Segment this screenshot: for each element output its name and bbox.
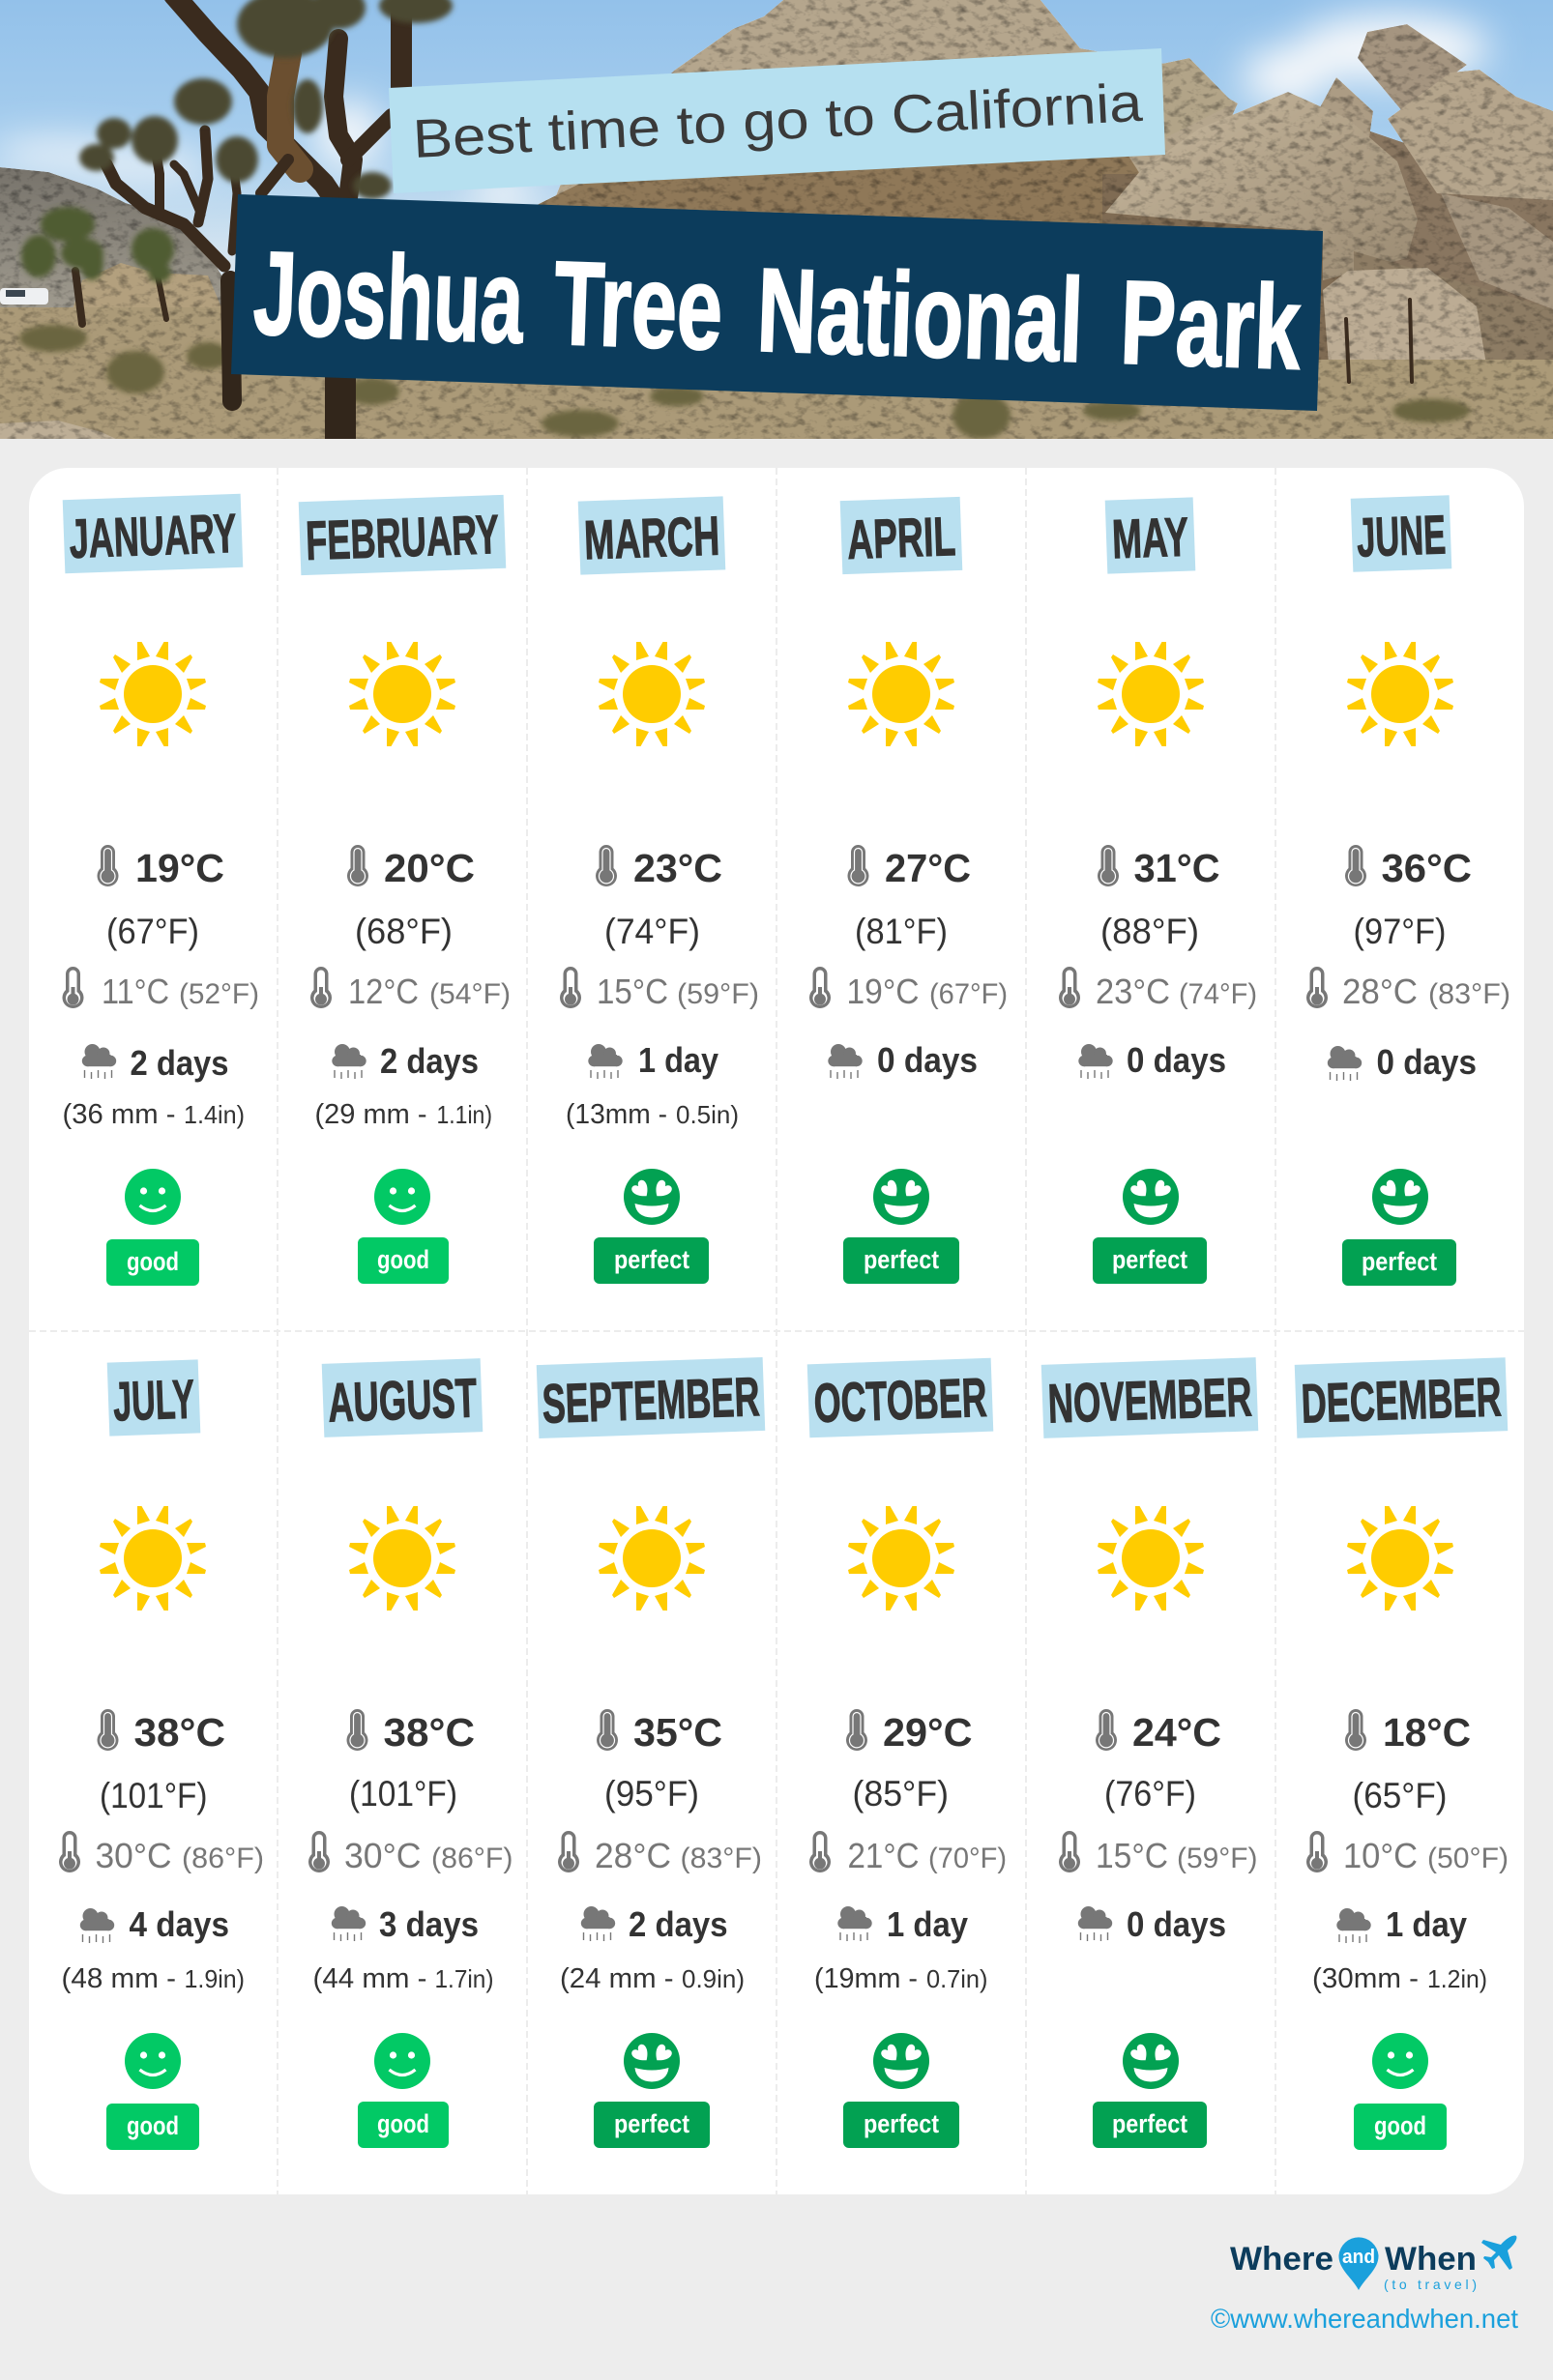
month label: November: [1041, 1357, 1258, 1438]
high temperature: (95°F): [604, 1774, 699, 1814]
icon: sun: [1098, 642, 1204, 746]
rating: perfect: [1342, 1169, 1456, 1286]
icon: sun: [599, 642, 705, 746]
rating: perfect: perfect: [864, 2109, 939, 2138]
rainfall: 4 days: [130, 1904, 229, 1944]
high temperature: [97, 845, 224, 951]
rainfall: 1.7in): [435, 1964, 493, 1993]
low temperature: 30°C: [344, 1836, 422, 1875]
low temperature: [809, 1831, 1007, 1875]
rating: good: [358, 2033, 449, 2148]
rainfall: 0.9in): [682, 1964, 745, 1993]
low temperature: (54°F): [429, 978, 511, 1010]
low temperature: (86°F): [431, 1843, 513, 1874]
month label: June: [1351, 495, 1451, 572]
low temperature: 15°C: [597, 972, 668, 1011]
low temperature: 19°C: [847, 972, 919, 1011]
low temperature: [1059, 1831, 1257, 1875]
rainfall: 2 days: [130, 1043, 228, 1083]
month label: April: APRIL: [846, 506, 956, 571]
high temperature: [1345, 1709, 1471, 1815]
month label: January: JANUARY: [69, 503, 238, 570]
rating: good: [1354, 2033, 1447, 2150]
rainfall: 0 days: [1127, 1040, 1226, 1080]
hero photo: Joshua trees and boulders: [0, 0, 1553, 454]
rainfall: 2 days: [629, 1904, 727, 1944]
panel: April: [809, 497, 1008, 1284]
rainfall: [313, 1904, 493, 1994]
rainfall: 0 days: [1127, 1904, 1226, 1944]
rainfall: 0 days: [877, 1040, 978, 1080]
rainfall: 2 days: [380, 1041, 479, 1081]
icon: sun: [349, 642, 455, 746]
rainfall: [62, 1904, 245, 1994]
rating: good: good: [377, 1245, 429, 1274]
panel: May: [1059, 497, 1257, 1284]
panel: November: [1041, 1357, 1258, 2148]
high temperature: (76°F): [1104, 1774, 1196, 1814]
low temperature: (59°F): [677, 978, 759, 1010]
low temperature: 23°C: [1096, 972, 1170, 1011]
month label: May: MAY: [1111, 507, 1189, 570]
low temperature: (83°F): [1428, 978, 1510, 1010]
rainfall: 0.5in): [676, 1100, 739, 1129]
high temperature: (65°F): [1352, 1776, 1447, 1815]
panel: June: [1306, 495, 1510, 1286]
low temperature: [62, 967, 259, 1011]
high temperature: 38°C: [133, 1710, 225, 1755]
high temperature: 36°C: [1381, 846, 1472, 890]
rating: good: good: [127, 2111, 179, 2140]
logo: Where and When (to travel): [1230, 2236, 1516, 2292]
icon: sun: [848, 642, 954, 746]
high temperature: 18°C: [1383, 1710, 1471, 1755]
high temperature: [1345, 845, 1472, 951]
rainfall: 1.9in): [184, 1964, 245, 1993]
rainfall: 1 day: [1386, 1904, 1467, 1944]
logo: Where and When (to travel): When: [1385, 2241, 1477, 2278]
high temperature: 29°C: [883, 1710, 973, 1755]
title banner: Joshua Tree National Park: Park: [1119, 256, 1304, 395]
low temperature: 28°C: [1342, 972, 1418, 1011]
low temperature: (83°F): [681, 1843, 762, 1874]
rating: good: good: [377, 2109, 429, 2138]
rainfall: (29 mm -: [315, 1099, 427, 1130]
high temperature: 35°C: [633, 1710, 722, 1755]
subtitle banner: Best time to go to California: Best time to go to California: [411, 72, 1145, 169]
low temperature: [560, 967, 759, 1011]
high temperature: [346, 1709, 475, 1814]
logo: Where and When (to travel): Where: [1230, 2241, 1333, 2278]
rainfall: (48 mm -: [62, 1963, 176, 1994]
low temperature: (70°F): [928, 1843, 1007, 1874]
panel: monthly climate card: [29, 468, 1524, 2194]
rainfall: 0.7in): [926, 1964, 988, 1993]
month label: January: [63, 494, 243, 573]
low temperature: [1306, 967, 1510, 1011]
low temperature: 30°C: [95, 1836, 172, 1875]
low temperature: 21°C: [847, 1836, 919, 1875]
icon: sun: [1347, 642, 1453, 746]
month label: July: JULY: [112, 1369, 195, 1433]
rainfall: [315, 1041, 492, 1130]
rainfall: [560, 1904, 745, 1994]
month label: August: [322, 1358, 483, 1437]
rainfall: (13mm -: [566, 1099, 667, 1130]
rating: perfect: perfect: [1112, 2109, 1187, 2138]
rating: perfect: [1093, 1169, 1207, 1284]
high temperature: 19°C: [135, 846, 224, 890]
month label: October: OCTOBER: [813, 1367, 988, 1435]
rainfall: [828, 1040, 978, 1080]
high temperature: [1098, 845, 1220, 951]
month label: November: NOVEMBER: [1047, 1366, 1253, 1436]
rainfall: 1.4in): [184, 1100, 245, 1129]
high temperature: (97°F): [1354, 912, 1447, 951]
icon: sun: [100, 1506, 206, 1611]
high temperature: 24°C: [1132, 1710, 1221, 1755]
rainfall: [814, 1904, 988, 1994]
title banner: Joshua Tree National Park: National: [755, 245, 1085, 388]
rating: good: good: [1374, 2111, 1426, 2140]
low temperature: 11°C: [102, 972, 169, 1011]
logo: Where and When (to travel): (to travel): [1384, 2277, 1477, 2292]
high temperature: 27°C: [885, 846, 971, 890]
low temperature: 10°C: [1343, 1836, 1418, 1875]
high temperature: [347, 845, 475, 951]
rainfall: (36 mm -: [62, 1099, 176, 1130]
rating: good: [106, 1169, 199, 1286]
low temperature: (86°F): [182, 1843, 264, 1874]
high temperature: [1096, 1709, 1221, 1814]
low temperature: 28°C: [595, 1836, 671, 1875]
rainfall: [1328, 1042, 1477, 1082]
subtitle banner: Best time to go to California: [389, 48, 1165, 193]
low temperature: [310, 967, 511, 1011]
high temperature: 20°C: [384, 846, 475, 890]
low temperature: [1059, 967, 1257, 1011]
rainfall: (24 mm -: [560, 1963, 673, 1994]
low temperature: (50°F): [1427, 1843, 1509, 1874]
month label: June: JUNE: [1356, 504, 1447, 569]
month label: October: [807, 1358, 993, 1437]
panel: September: [537, 1357, 765, 2148]
low temperature: 12°C: [348, 972, 419, 1011]
month label: September: [537, 1357, 765, 1438]
month label: April: [840, 497, 962, 574]
high temperature: [847, 845, 971, 951]
low temperature: (74°F): [1179, 978, 1257, 1010]
high temperature: [597, 1709, 722, 1814]
rainfall: (44 mm -: [313, 1963, 427, 1994]
high temperature: (85°F): [853, 1774, 949, 1814]
month label: March: MARCH: [583, 506, 720, 571]
high temperature: (81°F): [855, 912, 948, 951]
icon: sun: [848, 1506, 954, 1611]
icon: sun: [599, 1506, 705, 1611]
icon: sun: [100, 642, 206, 746]
month label: May: [1105, 497, 1195, 574]
rating: perfect: perfect: [1112, 1245, 1187, 1274]
rating: perfect: perfect: [1362, 1247, 1437, 1276]
month label: August: AUGUST: [327, 1367, 478, 1435]
rainfall: [566, 1040, 739, 1130]
high temperature: (74°F): [604, 912, 700, 951]
rating: good: [358, 1169, 449, 1284]
rainfall: [1078, 1904, 1226, 1944]
rating: perfect: [843, 2033, 959, 2148]
rating: perfect: [843, 1169, 959, 1284]
car: [0, 288, 48, 305]
rating: good: [106, 2033, 199, 2150]
rainfall: (30mm -: [1312, 1963, 1419, 1994]
rating: perfect: perfect: [614, 1245, 689, 1274]
rating: perfect: perfect: [864, 1245, 939, 1274]
panel: October: [807, 1358, 1007, 2148]
high temperature: 23°C: [633, 846, 722, 890]
icon: map pin: [1338, 2237, 1379, 2290]
high temperature: [596, 845, 722, 951]
title banner: Joshua Tree National Park: Joshua: [251, 227, 527, 368]
rainfall: 3 days: [379, 1904, 479, 1944]
high temperature: (68°F): [355, 912, 453, 951]
rainfall: [1078, 1040, 1226, 1080]
rating: perfect: [594, 2033, 710, 2148]
low temperature: [558, 1831, 762, 1875]
high temperature: 38°C: [383, 1710, 475, 1755]
month label: February: [299, 495, 506, 575]
high temperature: (67°F): [106, 912, 199, 951]
high temperature: [97, 1709, 225, 1815]
high temperature: (101°F): [349, 1774, 457, 1814]
rainfall: [1312, 1904, 1487, 1994]
high temperature: [846, 1709, 973, 1814]
low temperature: (59°F): [1177, 1843, 1257, 1874]
logo: Where and When (to travel): and: [1342, 2247, 1375, 2268]
panel: February: [299, 495, 511, 1284]
low temperature: [809, 967, 1008, 1011]
high temperature: (101°F): [100, 1776, 207, 1815]
panel: July: [59, 1359, 264, 2150]
panel: January: [62, 494, 259, 1286]
title banner: Joshua Tree National Park: [231, 194, 1323, 411]
title banner: Joshua Tree National Park: Tree: [552, 238, 724, 375]
panel: August: [308, 1358, 513, 2148]
rainfall: 1 day: [638, 1040, 718, 1080]
month label: July: [107, 1359, 200, 1437]
icon: sun: [349, 1506, 455, 1611]
low temperature: (52°F): [179, 978, 259, 1010]
website credit: ©www.whereandwhen.net: [1211, 2304, 1518, 2334]
rating: perfect: perfect: [614, 2109, 689, 2138]
rating: good: good: [127, 1247, 179, 1276]
high temperature: 31°C: [1133, 846, 1220, 890]
low temperature: [59, 1831, 264, 1875]
low temperature: (67°F): [929, 978, 1008, 1010]
month label: September: SEPTEMBER: [542, 1366, 761, 1436]
low temperature: [1306, 1831, 1509, 1875]
rainfall: 0 days: [1377, 1042, 1477, 1082]
icon: sun: [1347, 1506, 1453, 1611]
rating: perfect: [594, 1169, 709, 1284]
low temperature: 15°C: [1096, 1836, 1168, 1875]
icon: airplane: [1481, 2236, 1516, 2270]
low temperature: [308, 1831, 513, 1875]
rating: perfect: [1093, 2033, 1207, 2148]
month label: February: FEBRUARY: [305, 504, 500, 572]
icon: sun: [1098, 1506, 1204, 1611]
rainfall: 1.2in): [1427, 1964, 1487, 1993]
panel: December: [1295, 1357, 1509, 2150]
high temperature: (88°F): [1100, 912, 1199, 951]
rainfall: (19mm -: [814, 1963, 918, 1994]
panel: March: [560, 496, 759, 1284]
rainfall: 1.1in): [437, 1100, 492, 1129]
rainfall: [62, 1043, 245, 1130]
month label: March: [578, 496, 725, 575]
rainfall: 1 day: [887, 1904, 968, 1944]
